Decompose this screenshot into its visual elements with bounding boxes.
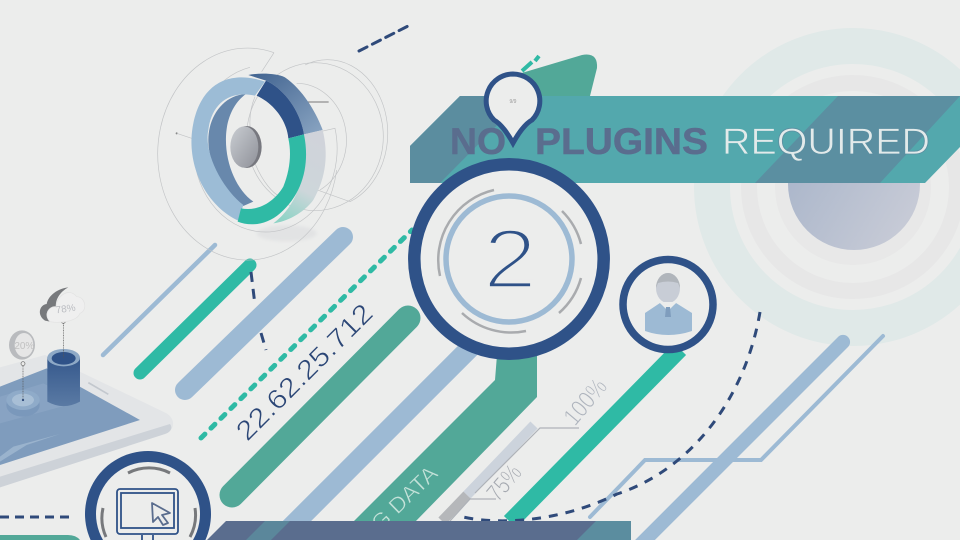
tablet illustration [0, 287, 173, 487]
top green tab [515, 55, 597, 100]
cylinder marker [40, 287, 85, 406]
map pin [486, 74, 540, 143]
100% label: 100% [558, 373, 613, 431]
monitor circle [85, 451, 211, 540]
banner title: PLUGINS [535, 121, 708, 162]
cylinder marker: 78% [55, 303, 76, 316]
banner title [450, 121, 930, 162]
75% label: 75% [481, 459, 528, 507]
number circle [414, 164, 604, 354]
data label: G DATA [366, 460, 443, 536]
donut shadow [257, 225, 317, 241]
green connector shape [353, 355, 537, 522]
segment: light blue [191, 77, 265, 221]
segment: teal [238, 134, 306, 224]
ring marker: 20% [14, 341, 34, 352]
thin blue diagonal [103, 245, 215, 355]
icon: person [645, 273, 692, 335]
segment: grey depth [273, 130, 326, 223]
bottom bar [207, 521, 631, 540]
segment: navy [257, 81, 304, 138]
blue diagonal bar [290, 340, 478, 528]
number 2: 2 [483, 212, 537, 306]
guide arcs [158, 48, 388, 260]
dashed line: bottom left [0, 516, 72, 518]
teal dashed diagonal [201, 230, 412, 438]
bottom left green tab [0, 535, 80, 540]
banner dark left section [410, 96, 526, 183]
banner title: REQUIRED [722, 121, 930, 162]
right thin blue connector [590, 336, 883, 517]
navy dashed vertical [251, 272, 266, 350]
tablet body [0, 355, 173, 487]
badge 20% [9, 330, 35, 360]
small teal connector [522, 56, 539, 71]
dashed line: top [359, 24, 412, 51]
segment: dark blue depth [248, 74, 323, 134]
segment: inner wall [208, 94, 253, 206]
cloud 78% [40, 287, 68, 322]
teal bar [140, 265, 250, 373]
light blue bar [185, 237, 343, 390]
icon: monitor [117, 489, 178, 540]
teal progress bar [510, 349, 680, 522]
bottom bar teal segment [577, 521, 631, 540]
map pin: 9/9 [510, 99, 517, 105]
donut chart [158, 48, 388, 260]
icon: cursor [152, 503, 170, 525]
right thick blue bar [635, 335, 850, 540]
banner title: NO [450, 121, 506, 162]
person circle [623, 260, 713, 350]
background concentric rings and sphere [712, 46, 960, 328]
banner dark stripe [755, 96, 960, 183]
IP address label: 22.62.25.712 [230, 297, 379, 447]
centre ball [230, 126, 262, 168]
banner [410, 96, 960, 183]
dashed navy curve [463, 312, 760, 521]
progress scale [442, 373, 613, 521]
green bar [232, 318, 408, 495]
tablet screen [0, 368, 140, 465]
ring marker [6, 330, 40, 417]
